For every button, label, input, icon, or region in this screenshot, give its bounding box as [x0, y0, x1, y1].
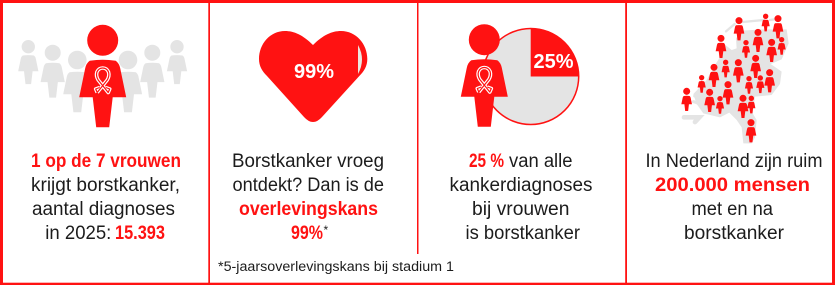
- text: 25 procent: is borstkanker: [466, 223, 581, 244]
- text: overlevingskans: overlevingskans: [239, 199, 378, 220]
- text: overlevingskans: 99%: [291, 223, 323, 244]
- text: 1 op de 7 vrouwen: in 2025:: [45, 223, 111, 244]
- panel: overlevingskans: [218, 31, 454, 274]
- chart: pie 25% with figure: [461, 24, 579, 127]
- icon: heart with 99%: 99%: [294, 61, 334, 83]
- text: 1 op de 7 vrouwen: 15.393: [115, 223, 165, 244]
- text: 25 procent: bij vrouwen: [472, 199, 570, 220]
- text: Nederland: In Nederland zijn ruim: [646, 151, 822, 172]
- panel: 1 op de 7 vrouwen: [18, 25, 187, 244]
- text: overlevingskans: ontdekt? Dan is de: [232, 175, 384, 196]
- text: overlevingskans: Borstkanker vroeg: [232, 151, 384, 172]
- text: 25 procent: van alle: [509, 151, 572, 172]
- icon: group of women with highlighted figure: [18, 25, 187, 127]
- text: overlevingskans: *: [324, 223, 328, 237]
- text: 25 procent: 25 %: [469, 151, 504, 172]
- panel: 25 procent: [450, 24, 598, 244]
- text: Nederland: 200.000 mensen: [655, 175, 810, 196]
- text: 1 op de 7 vrouwen: krijgt borstkanker,: [31, 175, 180, 196]
- text: 1 op de 7 vrouwen: 1 op de 7 vrouwen: [31, 151, 181, 172]
- panel: Nederland: [646, 14, 828, 244]
- icon: map of the Netherlands with figures: [681, 14, 789, 143]
- footnote: *5-jaarsoverlevingskans bij stadium 1: [218, 259, 454, 274]
- icon: heart with 99%: [259, 31, 367, 122]
- text: Nederland: met en na: [692, 199, 773, 220]
- chart: pie 25% with figure: 25%: [534, 51, 574, 73]
- text: Nederland: borstkanker: [684, 223, 785, 244]
- text: 25 procent: kankerdiagnoses: [450, 175, 592, 196]
- text: 1 op de 7 vrouwen: aantal diagnoses: [32, 199, 175, 220]
